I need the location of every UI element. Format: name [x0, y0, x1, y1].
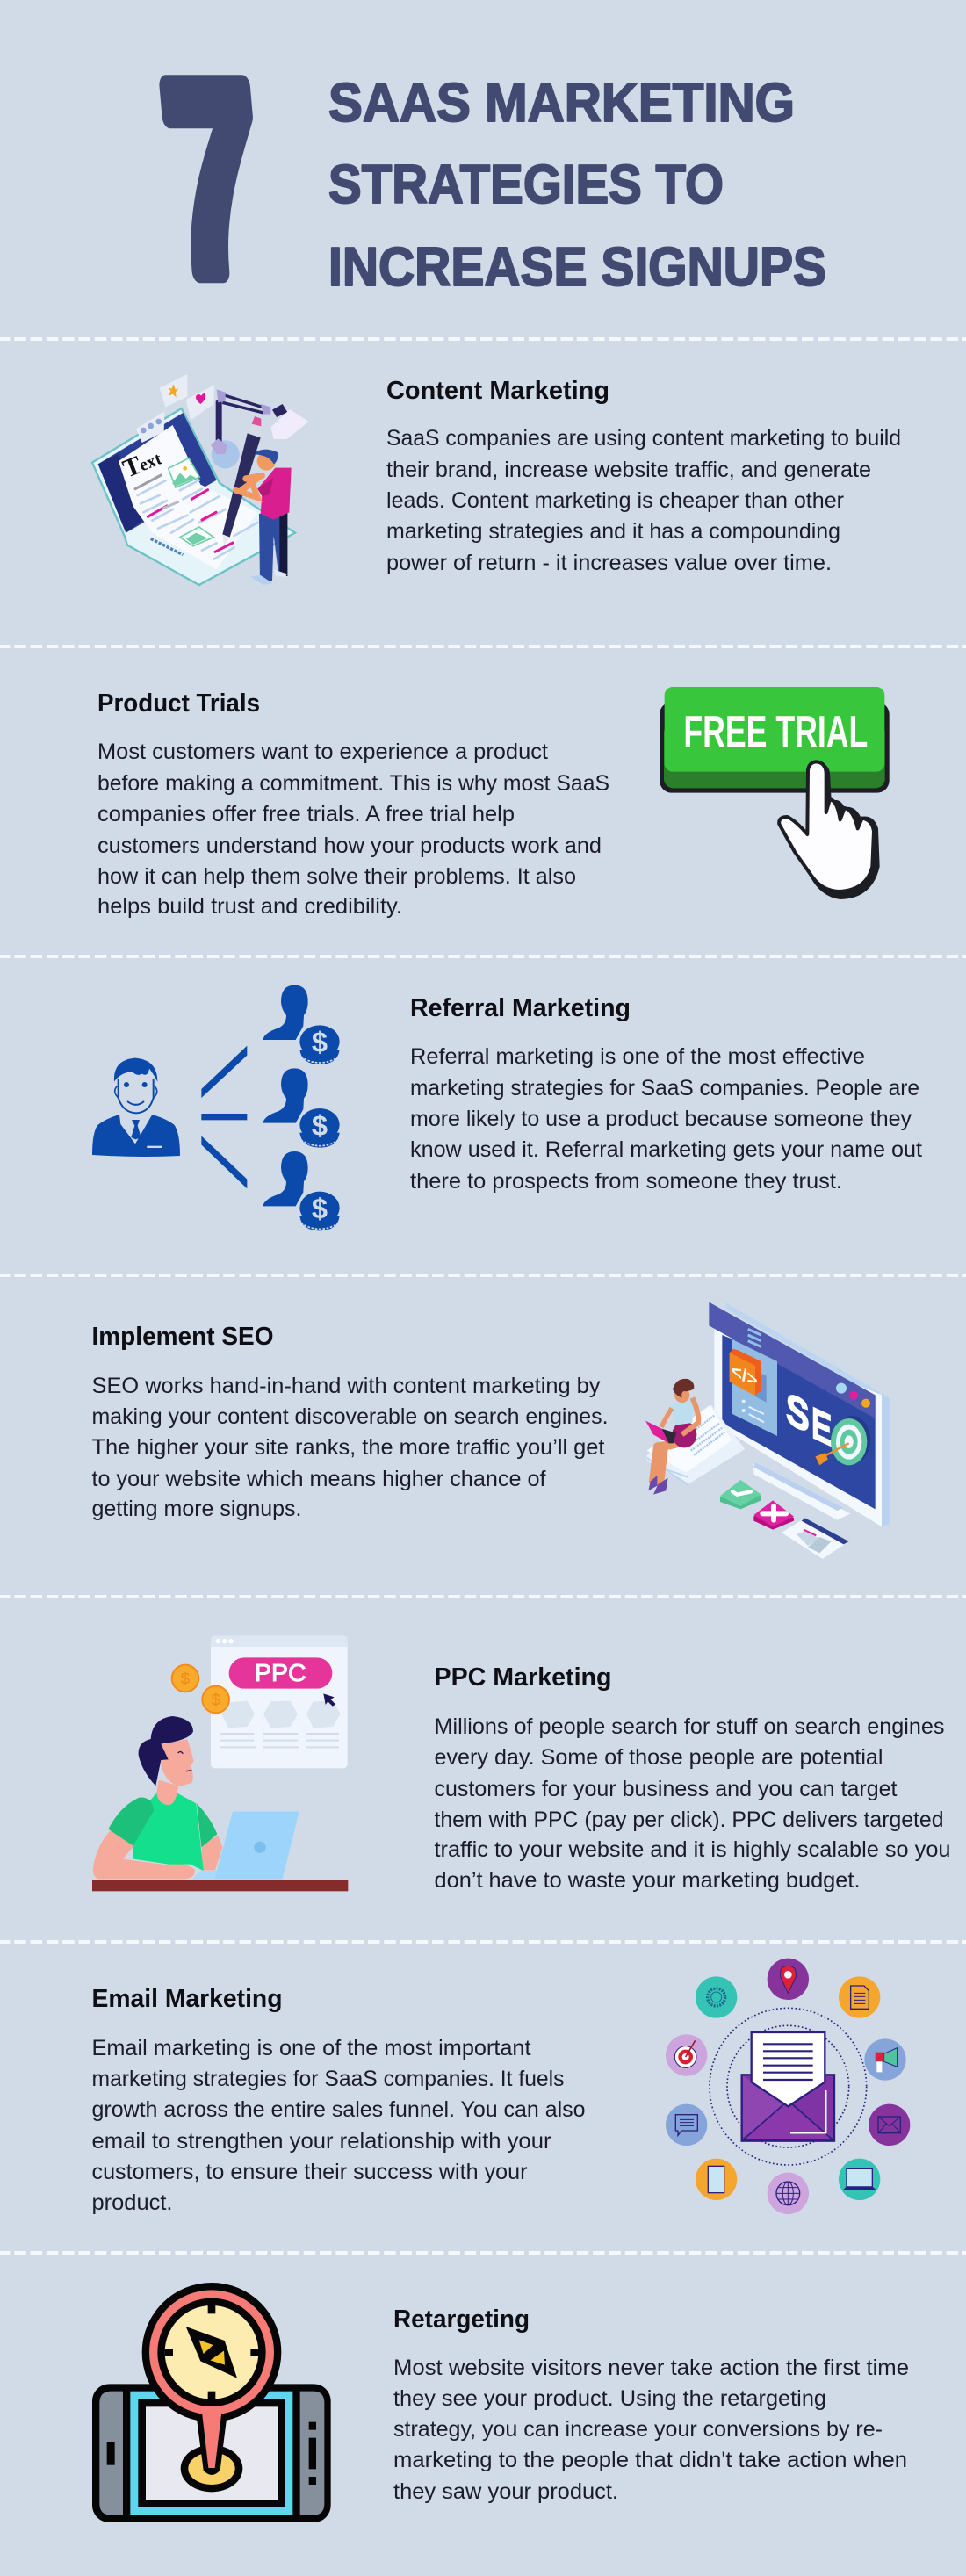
body text: Most customers want to experience a product — [97, 740, 548, 764]
body text: more likely to use a product because someone they — [410, 1107, 912, 1131]
body text: leads. Content marketing is cheaper than other — [386, 488, 844, 513]
body text: SaaS companies are using content marketing to build — [386, 426, 901, 451]
heading: Implement SEO — [91, 1323, 274, 1351]
panel: product trials — [97, 687, 890, 919]
body text: marketing strategies and it has a compounding — [386, 519, 840, 544]
referred customer 1 — [263, 985, 342, 1066]
body text: they saw your product. — [393, 2479, 618, 2504]
desk — [92, 1880, 348, 1891]
laptop — [192, 1812, 299, 1879]
heading: Retargeting — [393, 2305, 530, 2334]
coins: $ — [211, 1691, 220, 1709]
body text: marketing strategies for SaaS companies. People are — [410, 1076, 919, 1100]
big numeral 7: 7 — [155, 28, 271, 328]
body text: getting more signups. — [91, 1497, 302, 1521]
icon: target — [666, 2034, 707, 2076]
body text: they see your product. Using the retargeting — [393, 2386, 826, 2411]
body text: marketing to the people that didn't take action when — [393, 2448, 907, 2472]
body text: companies offer free trials. A free trial help — [97, 802, 515, 826]
body text: customers understand how your products work and — [97, 833, 602, 858]
referred customer 3 — [263, 1151, 342, 1232]
icon: mail — [869, 2104, 910, 2146]
illustration: seo monitor and woman with laptop — [645, 1302, 890, 1559]
title text: STRATEGIES TO — [328, 155, 724, 215]
body text — [386, 426, 901, 575]
referred customer 1: $ — [312, 1026, 328, 1058]
body text: Email marketing is one of the most important — [91, 2036, 531, 2060]
panel: referral marketing — [92, 985, 922, 1232]
ad window — [211, 1636, 348, 1768]
icon: megaphone — [864, 2038, 906, 2081]
panel: content marketing — [92, 374, 901, 585]
seo letters: S — [786, 1383, 810, 1443]
title text: INCREASE SIGNUPS — [328, 237, 826, 298]
body text: them with PPC (pay per click). PPC delivers targeted — [434, 1808, 943, 1832]
body text: Most website visitors never take action the first time — [393, 2356, 909, 2380]
heading: Email Marketing — [91, 1985, 283, 2013]
illustration: laptop, paper, lamp and man with pencil: T — [119, 451, 146, 483]
icon: speech bubble — [666, 2104, 707, 2146]
body text: customers, to ensure their success with your — [91, 2160, 527, 2184]
seo letters — [786, 1383, 832, 1456]
icon: compass pin — [142, 2283, 281, 2475]
heading: Product Trials — [97, 689, 260, 718]
body text: customers for your business and you can target — [434, 1777, 898, 1801]
coins — [171, 1664, 230, 1714]
panel: retargeting — [92, 2283, 909, 2522]
icon: businessman — [92, 1058, 180, 1157]
body text — [91, 1374, 608, 1521]
body text: The higher your site ranks, the more traffic you’ll get — [91, 1435, 605, 1460]
body text — [393, 2356, 909, 2504]
body text: know used it. Referral marketing gets your name out — [410, 1137, 922, 1162]
referred customer 3: $ — [312, 1192, 328, 1224]
heading: Referral Marketing — [410, 994, 631, 1022]
body text: growth across the entire sales funnel. You can also — [91, 2097, 585, 2122]
body text: marketing strategies for SaaS companies. It fuels — [91, 2067, 564, 2091]
body text: email to strengthen your relationship with your — [91, 2129, 551, 2154]
phone — [92, 2384, 331, 2522]
title — [155, 28, 826, 328]
body text: Referral marketing is one of the most effective — [410, 1044, 865, 1069]
title text: SAAS MARKETING — [328, 73, 795, 133]
body text: their brand, increase website traffic, and generate — [386, 458, 871, 482]
ad window: PPC — [255, 1659, 306, 1686]
connecting lines — [201, 1046, 247, 1188]
body text: Millions of people search for stuff on search engines — [434, 1714, 945, 1739]
man — [93, 1716, 222, 1879]
icon: plus tile — [753, 1500, 794, 1530]
body text: traffic to your website and it is highly scalable so you — [434, 1837, 950, 1862]
illustration: laptop, paper, lamp and man with pencil — [92, 374, 309, 585]
referred customer 2 — [263, 1068, 342, 1150]
woman — [645, 1379, 698, 1495]
body text: don’t have to waste your marketing budget. — [434, 1868, 861, 1893]
icon: location pin — [768, 1959, 809, 2000]
body text: to your website which means higher chance of — [91, 1467, 546, 1491]
icon: globe — [768, 2173, 809, 2214]
panel: implement seo — [91, 1302, 890, 1559]
body text — [91, 2036, 585, 2215]
icon: check tile — [720, 1480, 761, 1509]
icon: target with arrow — [815, 1416, 870, 1465]
icon: laptop — [839, 2159, 880, 2200]
heading: Content Marketing — [386, 377, 609, 405]
illustration: phone with compass pin — [92, 2283, 331, 2522]
heading: PPC Marketing — [434, 1663, 611, 1692]
body text — [434, 1714, 950, 1893]
icon: document — [839, 1976, 880, 2018]
body text: before making a commitment. This is why most SaaS — [97, 771, 609, 796]
title text — [328, 73, 826, 298]
panel: ppc marketing — [92, 1636, 950, 1893]
icon: gear — [696, 1976, 737, 2018]
illustration: seo monitor and woman with laptop: </> — [732, 1359, 758, 1392]
referred customer 2: $ — [312, 1108, 328, 1141]
body text — [97, 740, 609, 919]
body text: strategy, you can increase your conversions by re- — [393, 2417, 883, 2442]
body text: making your content discoverable on search engines. — [91, 1404, 608, 1429]
seo letters: E — [811, 1397, 832, 1456]
button — [660, 687, 890, 793]
body text: power of return - it increases value over time. — [386, 551, 832, 575]
illustration: referral network — [92, 985, 342, 1232]
illustration: envelope with orbiting icons — [666, 1959, 910, 2214]
illustration: man looking at ppc ad — [92, 1636, 348, 1891]
illustration: free trial button and hand — [660, 687, 890, 899]
body text: how it can help them solve their problems. It also — [97, 864, 576, 889]
icon: phone — [696, 2159, 737, 2200]
panel: email marketing — [91, 1959, 910, 2215]
icon: pointing hand — [778, 761, 880, 899]
body text: product. — [91, 2190, 172, 2215]
button: FREE TRIAL — [683, 707, 868, 757]
icon: envelope and letter — [742, 2032, 834, 2141]
body text — [410, 1044, 922, 1194]
body text: there to prospects from someone they trust. — [410, 1169, 842, 1194]
body text: SEO works hand-in-hand with content marketing by — [91, 1374, 601, 1398]
coins: $ — [181, 1670, 191, 1688]
illustration: laptop, paper, lamp and man with pencil: ext — [136, 449, 165, 475]
body text: every day. Some of those people are potential — [434, 1745, 883, 1770]
body text: helps build trust and credibility. — [97, 894, 402, 919]
